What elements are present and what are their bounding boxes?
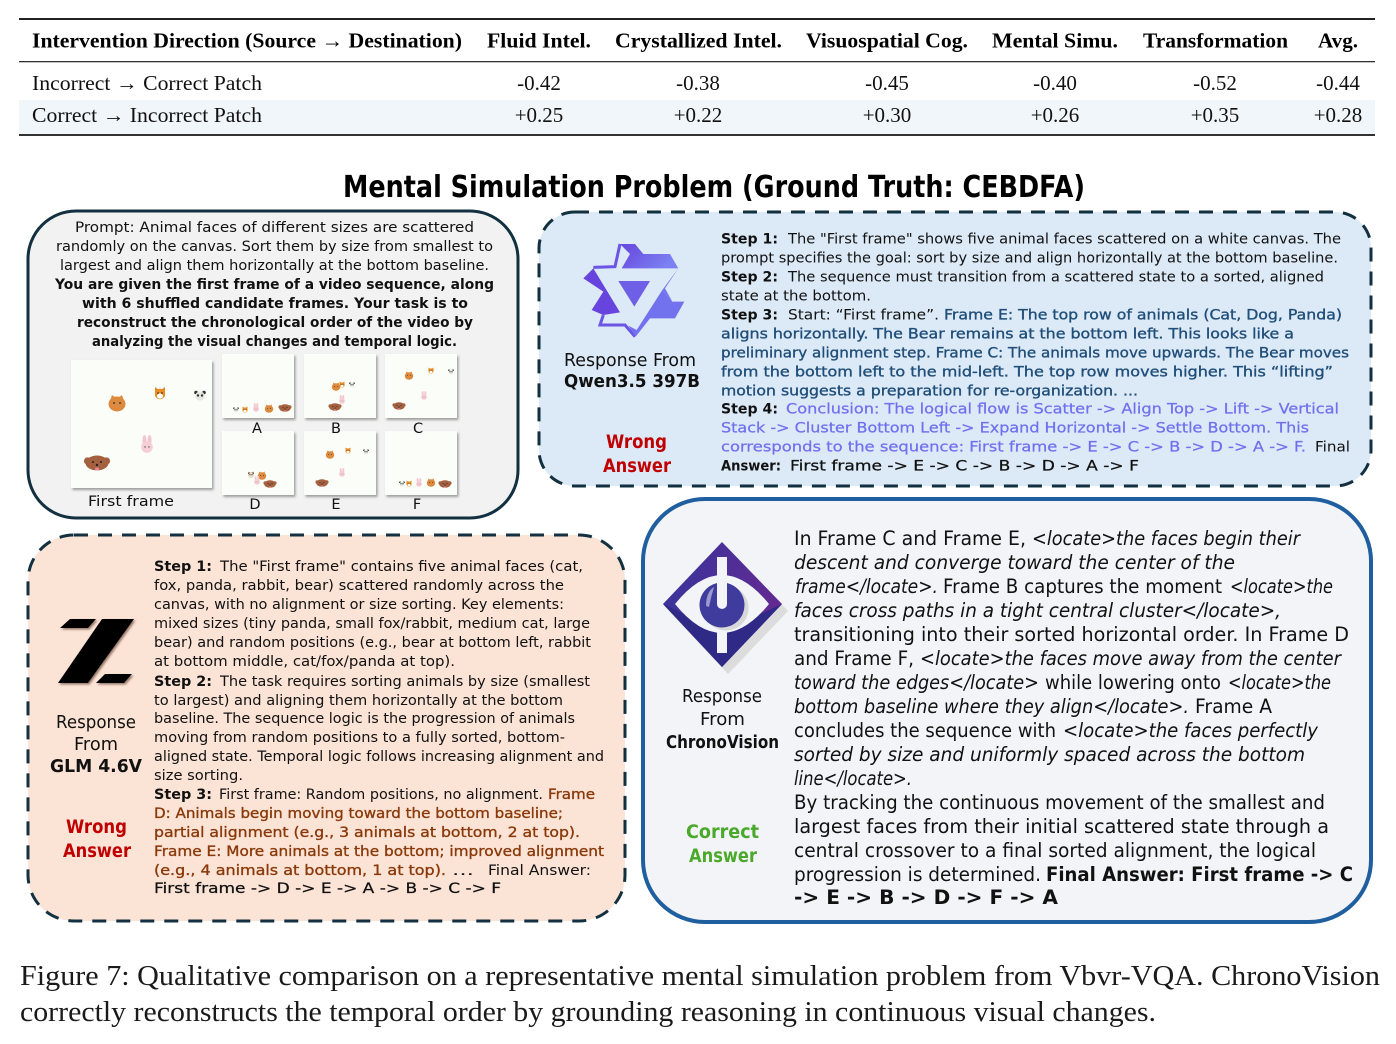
GLM reasoning text: partial alignment (e.g., 3 animals at bottom, 2 at top). bbox=[154, 825, 580, 841]
table row: incorrect to correct patch: -0.52 bbox=[1193, 71, 1237, 95]
ChronoVision reasoning text: and Frame F, bbox=[794, 647, 914, 670]
ChronoVision reasoning text: descent and converge toward the center of the bbox=[794, 551, 1235, 574]
figure caption bbox=[20, 960, 1381, 1028]
Qwen reasoning text: First frame -> E -> C -> B -> D -> A -> F bbox=[790, 458, 1139, 474]
prompt text: randomly on the canvas. Sort them by size from smallest to bbox=[56, 239, 493, 255]
ChronoVision reasoning text: <locate>the faces begin their bbox=[1032, 527, 1302, 550]
Qwen reasoning text: Step 3: bbox=[721, 308, 778, 324]
verdict: correct answer: Answer bbox=[689, 845, 758, 867]
model label: From bbox=[74, 734, 118, 755]
frame labels: A bbox=[252, 421, 262, 437]
ChronoVision reasoning text: Final Answer: First frame -> C bbox=[1046, 863, 1353, 886]
table row: correct to incorrect patch: +0.25 bbox=[515, 103, 563, 127]
frame labels: F bbox=[413, 497, 421, 513]
GLM reasoning text: Step 3: bbox=[154, 787, 212, 803]
first frame image bbox=[71, 360, 212, 488]
frame A bbox=[222, 354, 294, 418]
Qwen reasoning text: Answer: bbox=[721, 458, 781, 474]
GLM reasoning text: Frame bbox=[548, 787, 595, 803]
Qwen reasoning text: Conclusion: The logical flow is Scatter -> Align Top -> Lift -> Vertical bbox=[786, 402, 1339, 418]
GLM reasoning text: bear) and random positions (e.g., bear at bottom left, rabbit bbox=[154, 635, 591, 651]
frame labels bbox=[88, 421, 423, 513]
GLM reasoning text: The task requires sorting animals by size (smallest bbox=[219, 674, 590, 690]
GLM reasoning text: canvas, with no alignment or size sorting. Key elements: bbox=[154, 597, 564, 613]
prompt text: with 6 shuffled candidate frames. Your task is to bbox=[82, 296, 468, 312]
GLM reasoning text: Final Answer: bbox=[488, 863, 591, 879]
panel: GLM response bbox=[28, 535, 625, 921]
table row: incorrect to correct patch: -0.45 bbox=[865, 71, 909, 95]
prompt text: reconstruct the chronological order of the video by bbox=[77, 315, 474, 331]
ChronoVision reasoning text: By tracking the continuous movement of the smallest and bbox=[794, 791, 1325, 814]
GLM reasoning text: First frame: Random positions, no alignment. bbox=[219, 787, 543, 803]
verdict: wrong answer: Answer bbox=[603, 455, 672, 477]
model label bbox=[50, 712, 142, 777]
table row: incorrect to correct patch: -0.42 bbox=[517, 71, 561, 95]
model label bbox=[564, 350, 700, 392]
ChronoVision reasoning text: frame</locate>. bbox=[795, 575, 938, 598]
Qwen reasoning text: Step 2: bbox=[721, 270, 778, 286]
model label: Response bbox=[56, 712, 136, 733]
ChronoVision reasoning text: progression is determined. bbox=[794, 863, 1041, 886]
GLM reasoning text: D: Animals begin moving toward the bottom baseline; bbox=[154, 806, 563, 822]
Qwen reasoning text: Final bbox=[1315, 440, 1350, 456]
table row: correct to incorrect patch: Correct → Incorrect Patch bbox=[32, 103, 263, 127]
GLM reasoning text bbox=[154, 559, 604, 897]
verdict: wrong answer bbox=[63, 816, 132, 862]
GLM reasoning text: Frame E: More animals at the bottom; improved alignment bbox=[154, 844, 604, 860]
frame labels: B bbox=[331, 421, 341, 437]
icon: ChronoVision eye logo bbox=[663, 542, 788, 674]
table header row bbox=[32, 28, 1358, 52]
model label: ChronoVision bbox=[666, 732, 779, 753]
GLM reasoning text: (e.g., 4 animals at bottom, 1 at top). bbox=[154, 863, 446, 879]
prompt text: You are given the first frame of a video sequence, along bbox=[54, 277, 494, 293]
GLM reasoning text: aligned state. Temporal logic follows increasing alignment and bbox=[154, 749, 604, 765]
ChronoVision reasoning text: <locate>the bbox=[1230, 575, 1333, 598]
GLM reasoning text: baseline. The sequence logic is the progression of animals bbox=[154, 711, 575, 727]
Qwen reasoning text: Step 4: bbox=[721, 402, 778, 418]
frame labels: First frame bbox=[88, 494, 174, 510]
table header row: Avg. bbox=[1318, 28, 1358, 52]
Qwen reasoning text: corresponds to the sequence: First frame -> E -> C -> B -> D -> A -> F. bbox=[721, 440, 1306, 456]
frame C bbox=[385, 354, 457, 418]
Qwen reasoning text: Step 1: bbox=[721, 232, 778, 248]
GLM reasoning text: at bottom middle, cat/fox/panda at top). bbox=[154, 654, 455, 670]
model label: GLM 4.6V bbox=[50, 756, 142, 777]
panel: ChronoVision response bbox=[643, 499, 1371, 922]
GLM reasoning text: The "First frame" contains five animal faces (cat, bbox=[219, 559, 583, 575]
ChronoVision reasoning text: toward the edges</locate> bbox=[794, 671, 1039, 694]
table row: correct to incorrect patch: +0.26 bbox=[1031, 103, 1079, 127]
ChronoVision reasoning text: largest faces from their initial scattered state through a bbox=[794, 815, 1329, 838]
table: intervention results bbox=[19, 18, 1375, 136]
model label: Response From bbox=[564, 350, 696, 371]
Qwen reasoning text: Start: “First frame”. bbox=[788, 308, 939, 324]
ChronoVision reasoning text: faces cross paths in a tight central cluster</locate>, bbox=[794, 599, 1281, 622]
GLM reasoning text: fox, panda, rabbit, bear) scattered randomly across the bbox=[154, 578, 564, 594]
Qwen reasoning text: Stack -> Cluster Bottom Left -> Expand Horizontal -> Settle Bottom. This bbox=[721, 420, 1309, 436]
Qwen reasoning text: Frame E: The top row of animals (Cat, Dog, Panda) bbox=[944, 308, 1342, 324]
GLM reasoning text: Step 1: bbox=[154, 559, 212, 575]
icon: Qwen logo bbox=[583, 244, 684, 337]
panel: prompt bbox=[28, 211, 518, 518]
GLM reasoning text: to largest) and aligning them horizontally at the bottom bbox=[154, 693, 563, 709]
prompt text: analyzing the visual changes and temporal logic. bbox=[92, 334, 457, 350]
Qwen reasoning text: motion suggests a preparation for re-organization. ... bbox=[721, 384, 1138, 400]
ChronoVision reasoning text: <locate>the faces perfectly bbox=[1063, 719, 1318, 742]
Qwen reasoning text: from the bottom left to the mid-left. The top row moves higher. This “lifting” bbox=[721, 364, 1333, 380]
table row: incorrect to correct patch: -0.38 bbox=[676, 71, 720, 95]
prompt text: largest and align them horizontally at the bottom baseline. bbox=[60, 258, 489, 274]
figure caption: correctly reconstructs the temporal order by grounding reasoning in continuous visual changes. bbox=[20, 996, 1156, 1028]
prompt text bbox=[54, 220, 494, 350]
ChronoVision reasoning text: Frame A bbox=[1195, 695, 1273, 718]
model label: From bbox=[700, 709, 745, 730]
GLM reasoning text: size sorting. bbox=[154, 768, 243, 784]
table row: correct to incorrect patch: +0.30 bbox=[863, 103, 911, 127]
Qwen reasoning text: state at the bottom. bbox=[721, 288, 871, 304]
table header row: Transformation bbox=[1143, 28, 1288, 52]
Qwen reasoning text: The "First frame" shows five animal faces scattered on a white canvas. The bbox=[787, 232, 1341, 248]
frame B bbox=[304, 354, 376, 418]
verdict: wrong answer: Answer bbox=[63, 840, 132, 862]
ChronoVision reasoning text bbox=[794, 527, 1353, 909]
ChronoVision reasoning text: <locate>the bbox=[1228, 671, 1331, 694]
title: Mental Simulation Problem (Ground Truth: CEBDFA) bbox=[343, 170, 1085, 205]
table header row: Mental Simu. bbox=[992, 28, 1118, 52]
verdict: correct answer bbox=[686, 821, 759, 867]
panel: Qwen response bbox=[539, 212, 1371, 486]
frame labels: D bbox=[249, 497, 261, 513]
GLM reasoning text: ... bbox=[452, 863, 474, 879]
ChronoVision reasoning text: In Frame C and Frame E, bbox=[794, 527, 1026, 550]
GLM reasoning text: First frame -> D -> E -> A -> B -> C -> F bbox=[154, 881, 501, 897]
table header row: Visuospatial Cog. bbox=[806, 28, 968, 52]
frame F bbox=[385, 431, 457, 495]
ChronoVision reasoning text: <locate>the faces move away from the center bbox=[920, 647, 1343, 670]
table row: correct to incorrect patch: +0.28 bbox=[1314, 103, 1362, 127]
ChronoVision reasoning text: central crossover to a final sorted alignment, the logical bbox=[794, 839, 1316, 862]
ChronoVision reasoning text: sorted by size and uniformly spaced across the bottom bbox=[794, 743, 1305, 766]
ChronoVision reasoning text: line</locate>. bbox=[794, 767, 912, 790]
table row: incorrect to correct patch: -0.44 bbox=[1316, 71, 1360, 95]
GLM reasoning text: Step 2: bbox=[154, 674, 212, 690]
table row: incorrect to correct patch bbox=[32, 71, 1360, 95]
model label: Qwen3.5 397B bbox=[564, 371, 700, 392]
Qwen reasoning text: prompt specifies the goal: sort by size and align horizontally at the bottom baseline. bbox=[721, 250, 1338, 266]
GLM reasoning text: mixed sizes (tiny panda, small fox/rabbit, medium cat, large bbox=[154, 616, 590, 632]
ChronoVision reasoning text: transitioning into their sorted horizontal order. In Frame D bbox=[794, 623, 1349, 646]
figure caption: Figure 7: Qualitative comparison on a representative mental simulation problem from Vbvr-VQA. ChronoVision bbox=[20, 960, 1381, 992]
table header row: Intervention Direction (Source → Destination) bbox=[32, 28, 462, 52]
Qwen reasoning text: preliminary alignment step. Frame C: The animals move upwards. The Bear moves bbox=[721, 346, 1349, 362]
table header row: Fluid Intel. bbox=[487, 28, 591, 52]
ChronoVision reasoning text: concludes the sequence with bbox=[794, 719, 1056, 742]
frame E bbox=[304, 431, 376, 495]
table row: incorrect to correct patch: Incorrect → Correct Patch bbox=[32, 71, 263, 95]
table row: correct to incorrect patch: +0.35 bbox=[1191, 103, 1239, 127]
verdict: wrong answer: Wrong bbox=[66, 816, 127, 838]
verdict: correct answer: Correct bbox=[686, 821, 759, 843]
table row: correct to incorrect patch: +0.22 bbox=[674, 103, 722, 127]
GLM reasoning text: moving from random positions to a fully sorted, bottom- bbox=[154, 730, 565, 746]
ChronoVision reasoning text: while lowering onto bbox=[1045, 671, 1221, 694]
table row: correct to incorrect patch bbox=[32, 103, 1362, 127]
model label: Response bbox=[682, 686, 762, 707]
Qwen reasoning text bbox=[721, 232, 1350, 474]
model label bbox=[666, 686, 779, 753]
Qwen reasoning text: The sequence must transition from a scattered state to a sorted, aligned bbox=[787, 270, 1324, 286]
frame D bbox=[222, 431, 294, 495]
frame labels: C bbox=[413, 421, 423, 437]
table row: incorrect to correct patch: -0.40 bbox=[1033, 71, 1077, 95]
Qwen reasoning text: aligns horizontally. The Bear remains at the bottom left. This looks like a bbox=[721, 326, 1294, 342]
verdict: wrong answer: Wrong bbox=[606, 431, 667, 453]
verdict: wrong answer bbox=[603, 431, 672, 477]
ChronoVision reasoning text: -> E -> B -> D -> F -> A bbox=[794, 886, 1058, 909]
prompt text: Prompt: Animal faces of different sizes are scattered bbox=[75, 220, 474, 236]
table header row: Crystallized Intel. bbox=[615, 28, 782, 52]
icon: Z logo bbox=[58, 619, 134, 683]
ChronoVision reasoning text: Frame B captures the moment bbox=[943, 575, 1222, 598]
frame labels: E bbox=[331, 497, 341, 513]
ChronoVision reasoning text: bottom baseline where they align</locate>. bbox=[794, 695, 1189, 718]
